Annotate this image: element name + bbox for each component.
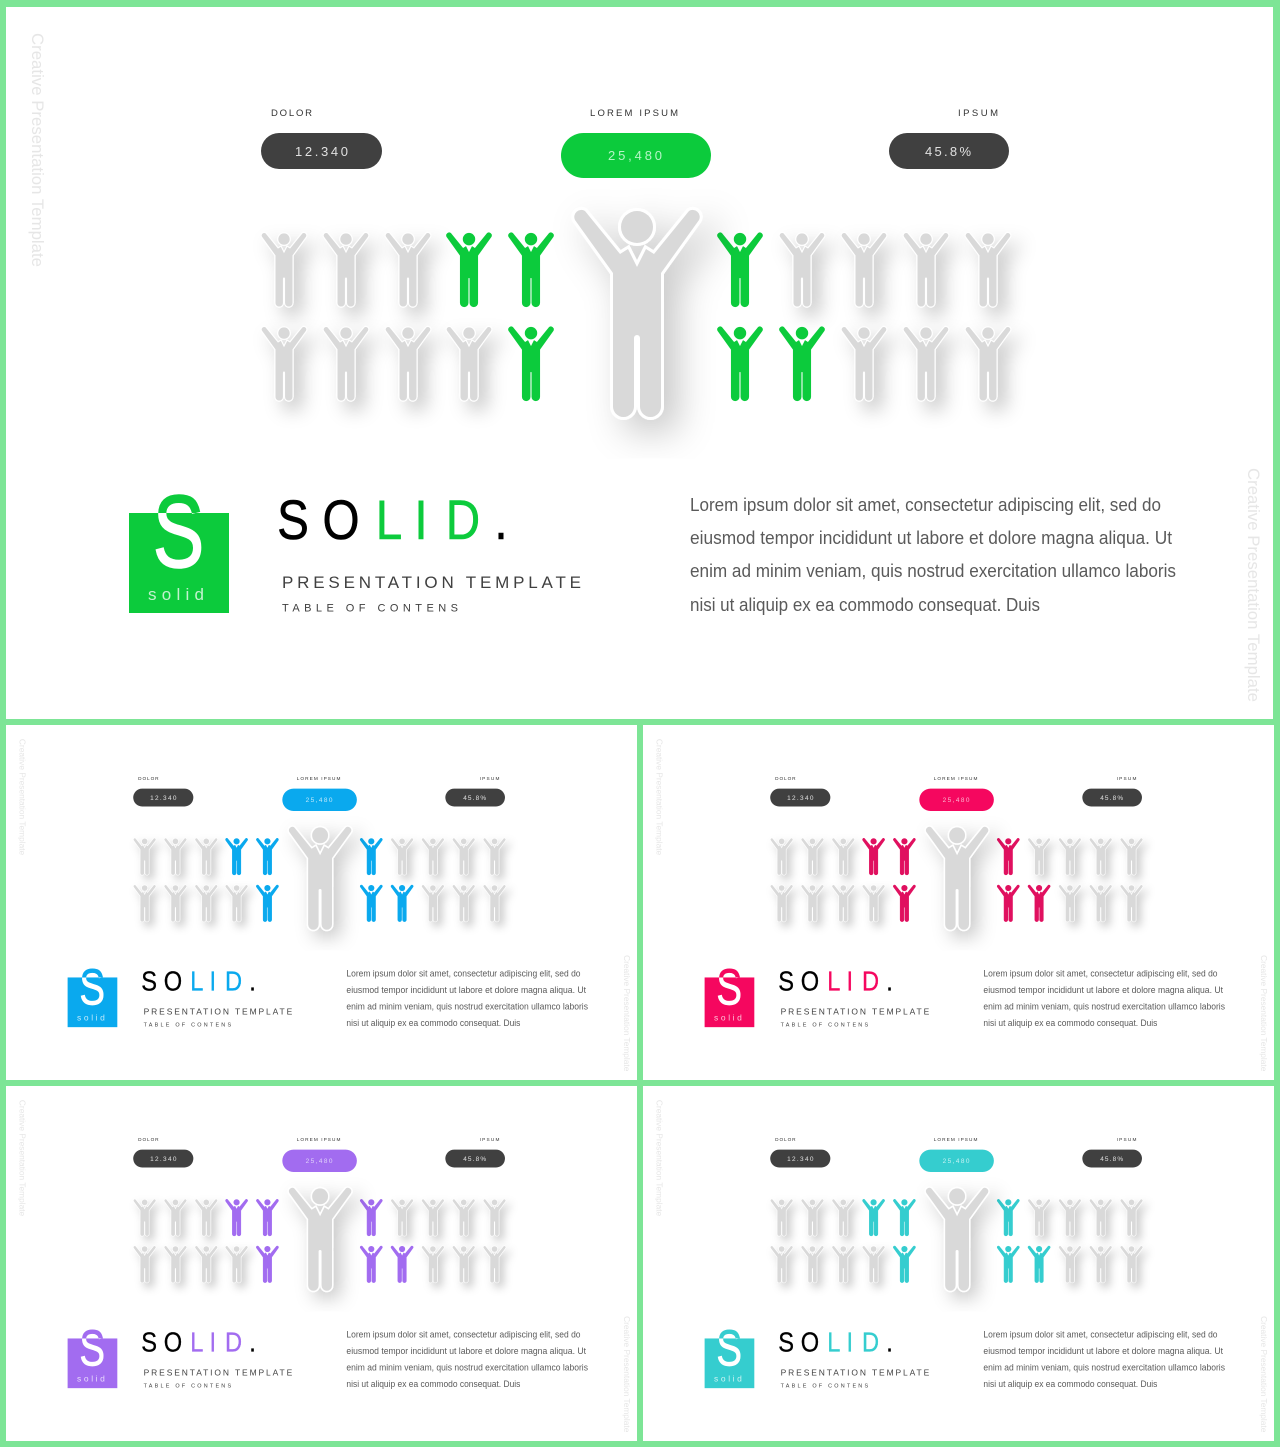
panel: pink slide: Creative Presentation Template xyxy=(654,739,664,855)
logo xyxy=(129,494,229,613)
panel: teal slide: O xyxy=(801,1328,819,1358)
panel: pink slide: S xyxy=(778,967,794,997)
body text: Lorem ipsum dolor sit amet, consectetur adipiscing elit, sed do xyxy=(690,495,1161,515)
panel: blue slide: I xyxy=(209,967,216,997)
title: L xyxy=(376,489,402,552)
stat: ipsum xyxy=(889,108,1009,169)
panel: teal slide: TABLE OF CONTENS xyxy=(781,1383,868,1389)
panel: pink slide: DOLOR xyxy=(775,776,796,782)
subtitle: PRESENTATION TEMPLATE xyxy=(282,573,581,592)
panel: blue slide: 25,480 xyxy=(306,797,333,804)
panel: teal slide: IPSUM xyxy=(1117,1137,1137,1143)
panel: teal slide: solid xyxy=(714,1374,742,1384)
panel: blue slide: solid xyxy=(77,1013,105,1023)
panel: teal slide: . xyxy=(886,1328,893,1358)
stat: dolor: 12.340 xyxy=(295,144,348,159)
panel: teal slide: LOREM IPSUM xyxy=(934,1137,978,1143)
panel: purple slide: L xyxy=(190,1328,203,1358)
pictogram: people row 2 xyxy=(262,327,1010,401)
stat: ipsum: 45.8% xyxy=(925,144,971,159)
panel: teal slide: 12.340 xyxy=(787,1156,814,1163)
panel: blue slide: TABLE OF CONTENS xyxy=(144,1022,231,1028)
panel: purple slide: DOLOR xyxy=(138,1137,159,1143)
panel: pink slide: S xyxy=(716,958,742,1016)
panel: teal slide: I xyxy=(846,1328,853,1358)
panel: pink slide: Lorem ipsum dolor sit amet, consectetur adipiscing elit, sed do xyxy=(983,968,1218,978)
panel: blue slide: O xyxy=(164,967,182,997)
panel: pink slide: solid xyxy=(714,1013,742,1023)
panel: teal slide: Creative Presentation Template xyxy=(654,1100,664,1216)
panel: pink slide: Creative Presentation Template xyxy=(1259,955,1269,1072)
title: O xyxy=(323,489,360,552)
panel: purple slide xyxy=(6,1086,637,1441)
panel: blue slide: nisi ut aliquip ex ea commodo consequat. Duis xyxy=(346,1018,521,1028)
panel: purple slide: D xyxy=(225,1328,242,1358)
panel: purple slide: LOREM IPSUM xyxy=(297,1137,341,1143)
panel: purple slide: 25,480 xyxy=(306,1158,333,1165)
panel: purple slide: S xyxy=(79,1319,105,1377)
panel: teal slide: L xyxy=(827,1328,840,1358)
caption: TABLE OF CONTENS xyxy=(282,602,458,614)
panel: purple slide: solid xyxy=(77,1374,105,1384)
panel: pink slide: PRESENTATION TEMPLATE xyxy=(781,1007,930,1017)
panel: blue slide: S xyxy=(141,967,157,997)
panel: pink slide: eiusmod tempor incididunt ut labore et dolore magna aliqua. Ut xyxy=(983,985,1223,995)
panel: purple slide: TABLE OF CONTENS xyxy=(144,1383,231,1389)
stat: ipsum: IPSUM xyxy=(958,108,998,119)
stat: dolor: DOLOR xyxy=(271,108,312,119)
panel: blue slide: IPSUM xyxy=(480,776,500,782)
panel: teal slide: S xyxy=(716,1319,742,1377)
panel: teal slide: S xyxy=(778,1328,794,1358)
panel: pink slide: L xyxy=(827,967,840,997)
stat: lorem ipsum xyxy=(561,108,711,178)
body text: eiusmod tempor incididunt ut labore et dolore magna aliqua. Ut xyxy=(690,528,1172,548)
panel: teal slide: eiusmod tempor incididunt ut labore et dolore magna aliqua. Ut xyxy=(983,1346,1223,1356)
body text xyxy=(690,495,1176,615)
panel: purple slide: nisi ut aliquip ex ea commodo consequat. Duis xyxy=(346,1379,521,1389)
panel: purple slide: 45.8% xyxy=(463,1156,486,1163)
panel: blue slide: 45.8% xyxy=(463,795,486,802)
panel: teal slide: PRESENTATION TEMPLATE xyxy=(781,1368,930,1378)
panel: teal slide: Creative Presentation Template xyxy=(1259,1316,1269,1433)
panel: teal slide xyxy=(643,1086,1274,1441)
panel: teal slide: Lorem ipsum dolor sit amet, consectetur adipiscing elit, sed do xyxy=(983,1329,1218,1339)
panel: purple slide: S xyxy=(141,1328,157,1358)
panel: teal slide: 45.8% xyxy=(1100,1156,1123,1163)
panel: pink slide: enim ad minim veniam, quis nostrud exercitation ullamco laboris xyxy=(983,1001,1225,1011)
panel: pink slide: 45.8% xyxy=(1100,795,1123,802)
panel: pink slide: 12.340 xyxy=(787,795,814,802)
logo: S xyxy=(153,475,204,590)
pictogram: people row 1 xyxy=(262,233,1010,307)
panel: blue slide: S xyxy=(79,958,105,1016)
panel: purple slide: enim ad minim veniam, quis nostrud exercitation ullamco laboris xyxy=(346,1362,588,1372)
title: I xyxy=(414,489,428,552)
panel: purple slide: . xyxy=(249,1328,256,1358)
logo: solid xyxy=(148,585,204,604)
panel: purple slide: IPSUM xyxy=(480,1137,500,1143)
title: S xyxy=(277,489,309,552)
panel: blue slide: S xyxy=(79,958,105,1016)
panel: pink slide: nisi ut aliquip ex ea commodo consequat. Duis xyxy=(983,1018,1158,1028)
panel: purple slide: Creative Presentation Template xyxy=(622,1316,632,1433)
panel: pink slide: TABLE OF CONTENS xyxy=(781,1022,868,1028)
stat: lorem ipsum: LOREM IPSUM xyxy=(590,108,678,119)
panel: blue slide: 12.340 xyxy=(150,795,177,802)
panel: pink slide: I xyxy=(846,967,853,997)
panel: teal slide: DOLOR xyxy=(775,1137,796,1143)
panel: blue slide: L xyxy=(190,967,203,997)
title xyxy=(277,489,508,552)
panel: blue slide: D xyxy=(225,967,242,997)
panel: purple slide: Lorem ipsum dolor sit amet, consectetur adipiscing elit, sed do xyxy=(346,1329,581,1339)
panel: blue slide: eiusmod tempor incididunt ut labore et dolore magna aliqua. Ut xyxy=(346,985,586,995)
title: . xyxy=(494,489,508,552)
panel: purple slide: Creative Presentation Template xyxy=(17,1100,27,1216)
panel: blue slide xyxy=(6,725,637,1080)
panel: blue slide: LOREM IPSUM xyxy=(297,776,341,782)
panel: teal slide: D xyxy=(862,1328,879,1358)
panel: purple slide: PRESENTATION TEMPLATE xyxy=(144,1368,293,1378)
panel: pink slide: S xyxy=(716,958,742,1016)
panel: pink slide: IPSUM xyxy=(1117,776,1137,782)
icon: large person xyxy=(574,210,700,417)
panel: pink slide: D xyxy=(862,967,879,997)
logo: S xyxy=(153,475,204,590)
panel: pink slide: . xyxy=(886,967,893,997)
panel: pink slide: LOREM IPSUM xyxy=(934,776,978,782)
stat: lorem ipsum: 25,480 xyxy=(608,148,662,163)
panel: pink slide: 25,480 xyxy=(943,797,970,804)
panel: pink slide xyxy=(643,725,1274,1080)
panel: blue slide: Creative Presentation Template xyxy=(17,739,27,855)
panel: main green slide xyxy=(6,7,1273,719)
side text left: Creative Presentation Template xyxy=(28,33,47,267)
panel: teal slide: enim ad minim veniam, quis nostrud exercitation ullamco laboris xyxy=(983,1362,1225,1372)
panel: purple slide: S xyxy=(79,1319,105,1377)
panel: blue slide: . xyxy=(249,967,256,997)
stat: dolor xyxy=(261,108,382,169)
panel: purple slide: 12.340 xyxy=(150,1156,177,1163)
body text: enim ad minim veniam, quis nostrud exercitation ullamco laboris xyxy=(690,561,1176,581)
panel: pink slide: O xyxy=(801,967,819,997)
panel: blue slide: PRESENTATION TEMPLATE xyxy=(144,1007,293,1017)
title: D xyxy=(446,489,480,552)
panel: blue slide: enim ad minim veniam, quis nostrud exercitation ullamco laboris xyxy=(346,1001,588,1011)
panel: blue slide: Creative Presentation Template xyxy=(622,955,632,1072)
panel: teal slide: nisi ut aliquip ex ea commodo consequat. Duis xyxy=(983,1379,1158,1389)
panel: blue slide: DOLOR xyxy=(138,776,159,782)
side text right: Creative Presentation Template xyxy=(1244,468,1263,702)
panel: blue slide: Lorem ipsum dolor sit amet, consectetur adipiscing elit, sed do xyxy=(346,968,581,978)
panel: purple slide: I xyxy=(209,1328,216,1358)
panel: teal slide: 25,480 xyxy=(943,1158,970,1165)
panel: teal slide: S xyxy=(716,1319,742,1377)
panel: purple slide: eiusmod tempor incididunt ut labore et dolore magna aliqua. Ut xyxy=(346,1346,586,1356)
body text: nisi ut aliquip ex ea commodo consequat. Duis xyxy=(690,595,1040,615)
panel: purple slide: O xyxy=(164,1328,182,1358)
